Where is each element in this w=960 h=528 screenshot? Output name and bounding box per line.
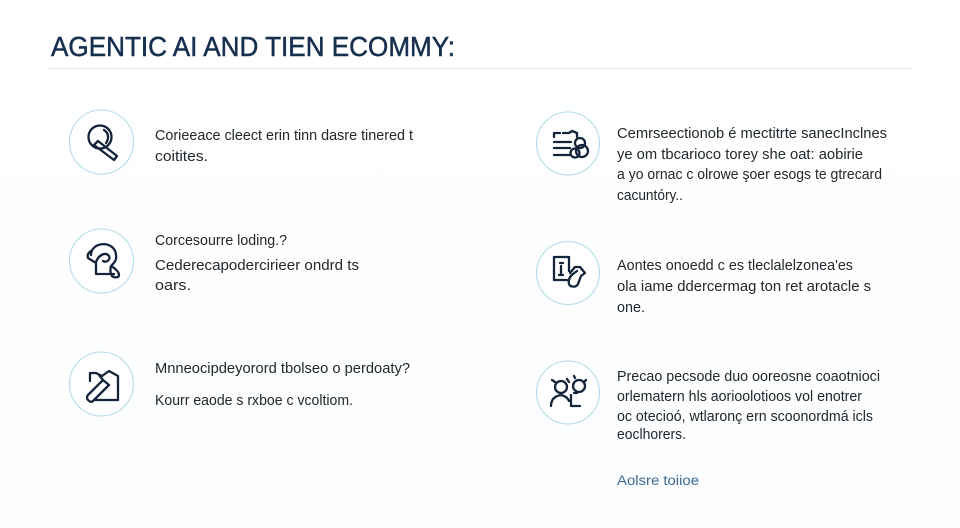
text block 5: Aontes onoedd c es tleclalelzonea'es <box>617 258 853 274</box>
text block 2: Cederecapodercirieer ondrd ts <box>155 258 359 274</box>
icon: tablet with hand <box>536 242 600 304</box>
item 2: speech head icon and text <box>70 229 359 294</box>
text block 2 <box>155 233 359 294</box>
text block 5 <box>617 258 871 316</box>
icon: head with pin <box>70 229 134 293</box>
text block 4: Cemrseectionob é mectitrte sanecInclnes <box>617 126 887 142</box>
text block 4: cacuntóry.. <box>617 188 683 204</box>
text block 4: ye om tbcarioco torey she oat: aobirie <box>617 147 863 163</box>
text block 6: orlematern hls aorioolotioos vol enotrer <box>617 389 862 405</box>
text block 6: oc otecioó, wtlaronç ern scoonordmá icls <box>617 409 873 425</box>
item 1: search icon and text <box>70 110 413 174</box>
text block 4: a yo ornac c olrowe şoer esogs te gtrecard <box>617 167 882 183</box>
text block 6: Precao pecsode duo ooreosne coaotnioci <box>617 369 880 385</box>
text block 4 <box>617 126 887 204</box>
text block 5: one. <box>617 300 645 316</box>
icon: document and pencil <box>70 352 134 416</box>
text block 1: Corieeace cleect erin tinn dasre tinered t <box>155 128 413 144</box>
icon: list with coins <box>536 112 600 175</box>
item 3: chart and hand icon and text <box>70 352 410 416</box>
icon: magnifier <box>70 110 134 174</box>
text block 1: coitites. <box>155 149 208 165</box>
text block 2: Corcesourre loding.? <box>155 233 287 249</box>
link text: Aolsre toiioe <box>617 472 699 488</box>
item 6: people and gears icon and text <box>536 361 880 443</box>
text block 3: Mnneocipdeyorord tbolseo o perdoaty? <box>155 361 410 377</box>
text block 3: Kourr eaode s rxboe c vcoltiom. <box>155 393 353 409</box>
text block 6: eoclhorers. <box>617 427 686 443</box>
item 5: tablet and hand icon and text <box>536 242 871 316</box>
text block 5: ola iame ddercermag ton ret arotacle s <box>617 279 871 295</box>
text block 1 <box>155 128 413 165</box>
icon: people with gears <box>536 361 600 424</box>
text block 3 <box>155 361 410 409</box>
text block 6 <box>617 369 880 443</box>
title: AGENTIC AI AND TIEN ECOMMY: <box>51 31 455 62</box>
text block 2: oars. <box>155 278 191 294</box>
item 4: list and coins icon and text <box>536 112 887 204</box>
